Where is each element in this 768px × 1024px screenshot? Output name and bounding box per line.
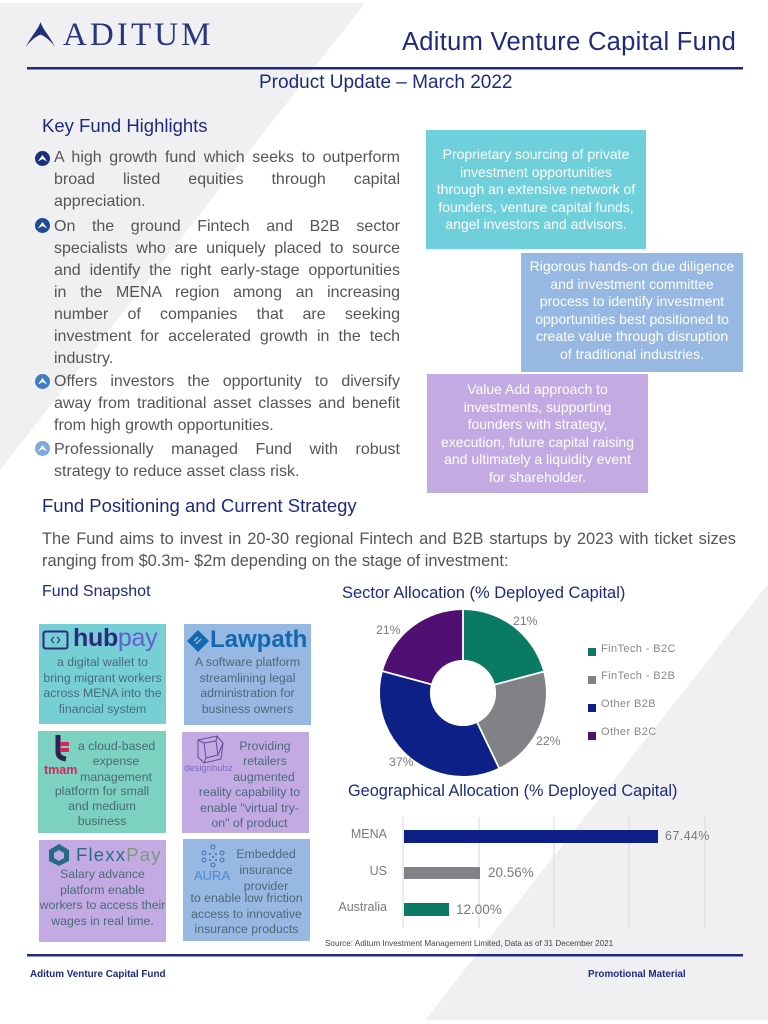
heading: fund positioning: Fund Positioning and Current Strategy <box>42 495 357 516</box>
chart: geographical bars: 12.00% <box>456 902 502 917</box>
card: hubpay: bring migrant workers <box>43 671 162 685</box>
legend: FinTech - B2B <box>601 670 675 682</box>
text: highlight 2: investment for accelerated growth in the tech <box>54 328 400 345</box>
card: tmam: a cloud-based <box>78 739 155 753</box>
card: aura: insurance <box>239 863 293 877</box>
card: designhubz: Providing <box>239 739 291 753</box>
card: flexxpay: platform enable <box>60 883 145 897</box>
logo: tmam: tmam <box>44 763 77 777</box>
text: highlight 4 <box>54 441 400 480</box>
logo: Aditum: ADITUM <box>63 17 214 53</box>
callout: sourcing: Proprietary sourcing of private <box>443 146 629 162</box>
card: designhubz: on" of product <box>211 816 288 830</box>
chart: geographical bars <box>338 817 710 928</box>
card: designhubz: augmented <box>233 770 295 784</box>
chart: geographical bars: US <box>370 864 387 878</box>
card: aura: provider <box>244 879 288 893</box>
text: highlight 4: strategy to reduce asset class risk. <box>54 463 299 480</box>
callout: due diligence: create value through disruption <box>536 328 728 344</box>
card: hubpay: financial system <box>59 702 146 716</box>
card: tmam: platform for small <box>55 784 149 798</box>
card: lawpath: A software platform <box>195 655 300 669</box>
chart: geographical bars: Australia <box>338 900 387 914</box>
title: Aditum Venture Capital Fund <box>402 28 736 56</box>
logo: flexxpay: FlexxPay <box>76 844 162 865</box>
icon: bullet 1 <box>35 151 50 166</box>
subtitle: Product Update – March 2022 <box>259 72 512 93</box>
legend <box>588 643 676 740</box>
card: designhubz: retailers <box>243 754 287 768</box>
logo: designhubz: designhubz <box>184 763 233 774</box>
callout: value add <box>427 374 648 493</box>
card: designhubz: enable "virtual try- <box>200 801 299 815</box>
card: hubpay <box>39 624 166 724</box>
chart: sector donut <box>380 610 546 776</box>
text: highlight 2 <box>54 218 400 367</box>
text: highlight 3: Offers investors the opportunity to diversify <box>54 373 400 390</box>
text: highlight 3: from high growth opportunities. <box>54 417 274 434</box>
callout: due diligence: Rigorous hands-on due diligence <box>530 258 734 274</box>
callout: due diligence: of traditional industries. <box>560 346 704 362</box>
card: tmam: business <box>78 814 126 828</box>
callout: sourcing: angel investors and advisors. <box>445 216 627 232</box>
card: flexxpay: Salary advance <box>60 867 145 881</box>
icon: bullet 3 <box>35 374 50 389</box>
footer left: Aditum Venture Capital Fund <box>30 969 166 980</box>
legend: Other B2B <box>601 698 656 710</box>
card: lawpath: streamlining legal <box>200 671 295 685</box>
card: aura <box>183 839 310 941</box>
footer right: Promotional Material <box>588 969 686 980</box>
card: tmam <box>38 731 166 833</box>
source note: Source: Aditum Investment Management Limited, Data as of 31 December 2021 <box>325 939 613 948</box>
icon: bullet 2 <box>35 218 50 233</box>
callout: value add: execution, future capital raising <box>441 434 634 450</box>
heading: key fund highlights: Key Fund Highlights <box>42 115 208 136</box>
card: hubpay: across MENA into the <box>43 686 162 700</box>
text: highlight 1: broad listed equities through capital <box>54 171 400 188</box>
callout: value add: Value Add approach to <box>467 381 608 397</box>
card: aura: insurance products <box>195 922 298 936</box>
callout: value add: founders with strategy, <box>468 416 607 432</box>
legend: Other B2C <box>601 726 657 738</box>
chart: geographical bars: 20.56% <box>488 865 534 880</box>
card: aura: to enable low friction <box>190 891 303 905</box>
text: highlight 2: number of companies that are seeking <box>54 306 400 323</box>
callout: value add: investments, supporting <box>464 399 611 415</box>
logo: designhubz <box>184 736 233 774</box>
text: highlight 2: specialists who are uniquely placed to source <box>54 240 400 257</box>
card: lawpath <box>184 624 311 725</box>
logo: hubpay: hubpay <box>73 624 157 652</box>
card: aura: Embedded <box>236 847 296 861</box>
heading: fund snapshot: Fund Snapshot <box>42 583 151 600</box>
text: highlight 4: Professionally managed Fund with robust <box>54 441 400 458</box>
callout: due diligence: opportunities best positioned to <box>535 311 729 327</box>
callout: sourcing: investment opportunities <box>460 164 612 180</box>
card: designhubz <box>182 732 309 833</box>
chart: geographical bars: 67.44% <box>665 829 710 843</box>
text: highlight 3: away from traditional asset classes and benefit <box>54 395 400 412</box>
heading: sector allocation: Sector Allocation (% Deployed Capital) <box>342 584 625 602</box>
callout: due diligence: and investment committee <box>550 276 714 292</box>
text: highlight 2: On the ground Fintech and B2B sector <box>54 218 400 235</box>
icon: bullet 4 <box>35 441 50 456</box>
card: tmam: and medium <box>68 799 136 813</box>
callout: value add: for shareholder. <box>489 469 586 485</box>
logo: tmam <box>44 735 77 777</box>
callout: value add: and ultimately a liquidity event <box>444 451 631 467</box>
label: 21% fintech b2c: 21% <box>513 614 538 628</box>
heading: geographical allocation: Geographical Allocation (% Deployed Capital) <box>348 782 677 800</box>
card: flexxpay: wages in real time. <box>51 914 154 928</box>
card: flexxpay: workers to access their <box>40 898 165 912</box>
card: tmam: expense <box>93 754 139 768</box>
text: highlight 2: and identify the right early-stage opportunities <box>54 262 400 279</box>
card: lawpath: administration for <box>200 686 295 700</box>
text: strategy paragraph: The Fund aims to invest in 20-30 regional Fintech and B2B startups by 2023 with ticket sizes <box>42 530 736 548</box>
card: flexxpay <box>39 840 166 942</box>
card: designhubz: reality capability to <box>199 785 300 799</box>
card: hubpay: a digital wallet to <box>57 655 148 669</box>
logo: lawpath: Lawpath <box>210 626 307 653</box>
text: highlight 1 <box>54 149 400 210</box>
text: highlight 1: appreciation. <box>54 193 146 210</box>
text: highlight 2: industry. <box>54 350 113 367</box>
label: 21% other b2c: 21% <box>376 623 401 637</box>
callout: sourcing: through an extensive network of <box>437 181 635 197</box>
logo: aura: AURA <box>194 868 230 883</box>
callout: due diligence <box>521 253 743 372</box>
card: tmam: management <box>80 770 152 784</box>
logo: aura <box>194 844 230 883</box>
card: aura: access to innovative <box>191 907 302 921</box>
text: highlight 1: A high growth fund which seeks to outperform <box>54 149 400 166</box>
callout: sourcing: founders, venture capital funds, <box>438 199 634 215</box>
callout: due diligence: process to identify investment <box>540 293 724 309</box>
label: 22% fintech b2b: 22% <box>536 734 561 748</box>
callout: sourcing <box>426 130 646 249</box>
text: strategy paragraph <box>42 530 736 570</box>
legend: FinTech - B2C <box>601 643 676 655</box>
text: highlight 3 <box>54 373 400 434</box>
text: strategy paragraph: ranging from $0.3m- $2m depending on the stage of investment: <box>42 552 509 570</box>
text: highlight 2: in the MENA region among an increasing <box>54 284 400 301</box>
label: 37% other b2b: 37% <box>389 755 414 769</box>
card: lawpath: business owners <box>202 702 293 716</box>
chart: geographical bars: MENA <box>351 827 388 841</box>
